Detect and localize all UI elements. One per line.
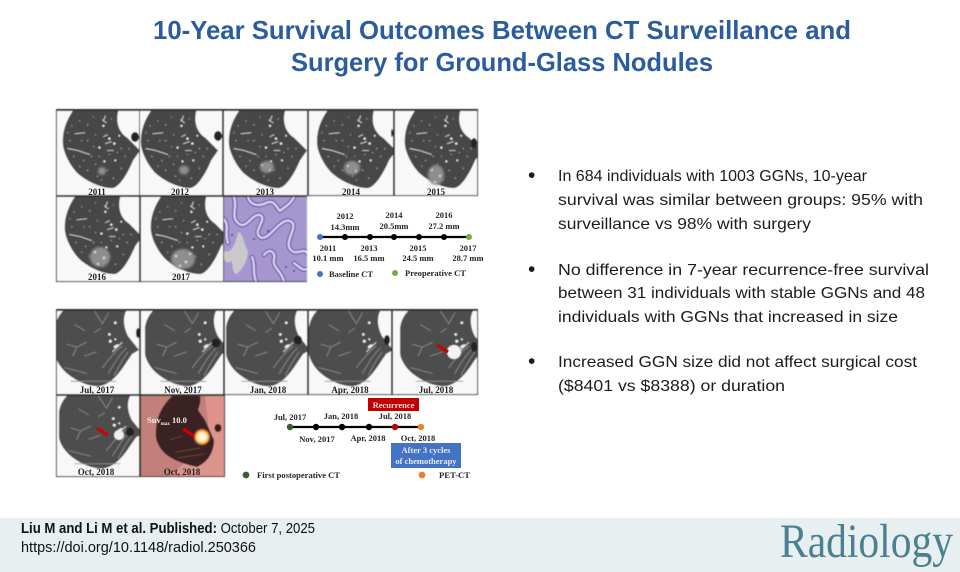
bullet: recurrence-free survival: No difference in 7-year recurrence-free survival: [558, 262, 929, 279]
callout: recurrence: [368, 398, 419, 411]
text block: key findings: [528, 164, 929, 395]
timeline: nodule size 2011 to 2017: 2017: [460, 243, 477, 253]
CT date labels: [78, 385, 454, 477]
timeline: postoperative follow-up: Apr, 2018: [350, 433, 386, 443]
SUVmax label: max: [161, 422, 170, 427]
panel: nodule growth case, CT series 2011 to 2017: [43, 106, 499, 286]
bullet: survival: surveillance vs 98% with surgery: [558, 216, 811, 233]
footer band: [0, 515, 960, 572]
timeline: nodule size 2011 to 2017: 2016: [436, 210, 452, 220]
callout: after 3 cycles of chemotherapy: After 3 cycles: [402, 445, 451, 455]
CT year labels: 2016: [88, 272, 106, 282]
SUVmax label: Suv: [147, 415, 161, 425]
timeline: postoperative follow-up: Jul, 2017: [274, 412, 307, 422]
CT year labels: [88, 187, 446, 282]
title: 10-Year Survival Outcomes Between CT Surveillance and: [153, 15, 851, 45]
bullet: survival: survival was similar between groups: 95% with: [558, 192, 923, 209]
citation: https://doi.org/10.1148/radiol.250366: [21, 539, 256, 556]
bullet: survival: [528, 164, 923, 233]
timeline: nodule size 2011 to 2017: 24.5 mm: [402, 253, 434, 263]
bullet: recurrence-free survival: [528, 258, 929, 326]
histology image: [223, 196, 308, 282]
red arrows: [97, 345, 448, 436]
bullet: cost and duration: Increased GGN size did not affect surgical cost: [558, 354, 918, 371]
callout: recurrence: Recurrence: [373, 400, 415, 410]
CT date labels: Jul, 2018: [419, 385, 454, 395]
bullet: recurrence-free survival: •: [528, 258, 535, 281]
CT date labels: Nov, 2017: [164, 385, 202, 395]
CT year labels: 2012: [171, 187, 190, 197]
CT date labels: Apr, 2018: [331, 385, 369, 395]
timeline: nodule size 2011 to 2017: 20.5mm: [379, 221, 409, 231]
CT date labels: Jul, 2017: [80, 385, 115, 395]
callout: after 3 cycles of chemotherapy: [391, 443, 461, 468]
PET-CT image: [141, 396, 224, 476]
CT images: [42, 306, 503, 481]
CT year labels: 2011: [88, 187, 106, 197]
bullet: recurrence-free survival: between 31 individuals with stable GGNs and 48: [558, 285, 925, 302]
timeline: nodule size 2011 to 2017: 2012: [336, 211, 354, 221]
timeline: nodule size 2011 to 2017: 2011: [320, 243, 336, 253]
bullet: survival: In 684 individuals with 1003 GGNs, 10-year: [558, 168, 868, 185]
CT year labels: 2017: [172, 272, 190, 282]
title: [153, 15, 851, 77]
timeline: postoperative follow-up: Nov, 2017: [299, 434, 335, 444]
legend: first postoperative CT and PET-CT: PET-CT: [439, 470, 470, 480]
SUVmax label: 10.0: [170, 415, 187, 425]
timeline: nodule size 2011 to 2017: 10.1 mm: [312, 253, 344, 263]
CT date labels: Oct, 2018: [164, 467, 201, 477]
callout: after 3 cycles of chemotherapy: of chemotherapy: [395, 456, 457, 466]
citation: [21, 520, 315, 556]
timeline: nodule size 2011 to 2017: 27.2 mm: [428, 221, 460, 231]
timeline: nodule size 2011 to 2017: 2015: [410, 243, 426, 253]
legend: baseline and preoperative CT: [317, 268, 466, 279]
CT year labels: 2013: [256, 187, 274, 197]
citation: Liu M and Li M et al. Published: October 7, 2025: [21, 520, 315, 537]
legend: first postoperative CT and PET-CT: [243, 470, 470, 480]
bullet: survival: •: [528, 164, 535, 187]
CT date labels: Jan, 2018: [250, 385, 287, 395]
CT images and histology: [43, 106, 499, 286]
legend: first postoperative CT and PET-CT: First postoperative CT: [257, 470, 340, 480]
timeline: nodule size 2011 to 2017: 14.3mm: [330, 222, 360, 232]
CT year labels: 2015: [427, 187, 446, 197]
legend: baseline and preoperative CT: Preoperative CT: [405, 268, 466, 278]
timeline: nodule size 2011 to 2017: [312, 210, 484, 263]
CT year labels: 2014: [342, 187, 360, 197]
bullet: cost and duration: ($8401 vs $8388) or duration: [558, 378, 785, 395]
timeline: postoperative follow-up: Jan, 2018: [324, 411, 358, 421]
timeline: postoperative follow-up: Jul, 2018: [379, 411, 411, 421]
timeline: postoperative follow-up: [274, 411, 435, 444]
panel: recurrence case, CT series Jul 2017 to Oct 2018: [42, 306, 503, 481]
bullet: cost and duration: [528, 350, 918, 395]
legend: baseline and preoperative CT: Baseline CT: [329, 269, 373, 279]
timeline: nodule size 2011 to 2017: 28.7 mm: [452, 253, 484, 263]
bullet: cost and duration: •: [528, 350, 535, 373]
timeline: nodule size 2011 to 2017: 2014: [386, 210, 403, 220]
timeline: nodule size 2011 to 2017: 2013: [360, 243, 378, 253]
bullet: recurrence-free survival: individuals with GGNs that increased in size: [558, 309, 898, 326]
timeline: postoperative follow-up: Oct, 2018: [401, 433, 435, 443]
CT date labels: Oct, 2018: [78, 467, 115, 477]
title: Surgery for Ground-Glass Nodules: [291, 47, 713, 77]
timeline: nodule size 2011 to 2017: 16.5 mm: [353, 253, 385, 263]
